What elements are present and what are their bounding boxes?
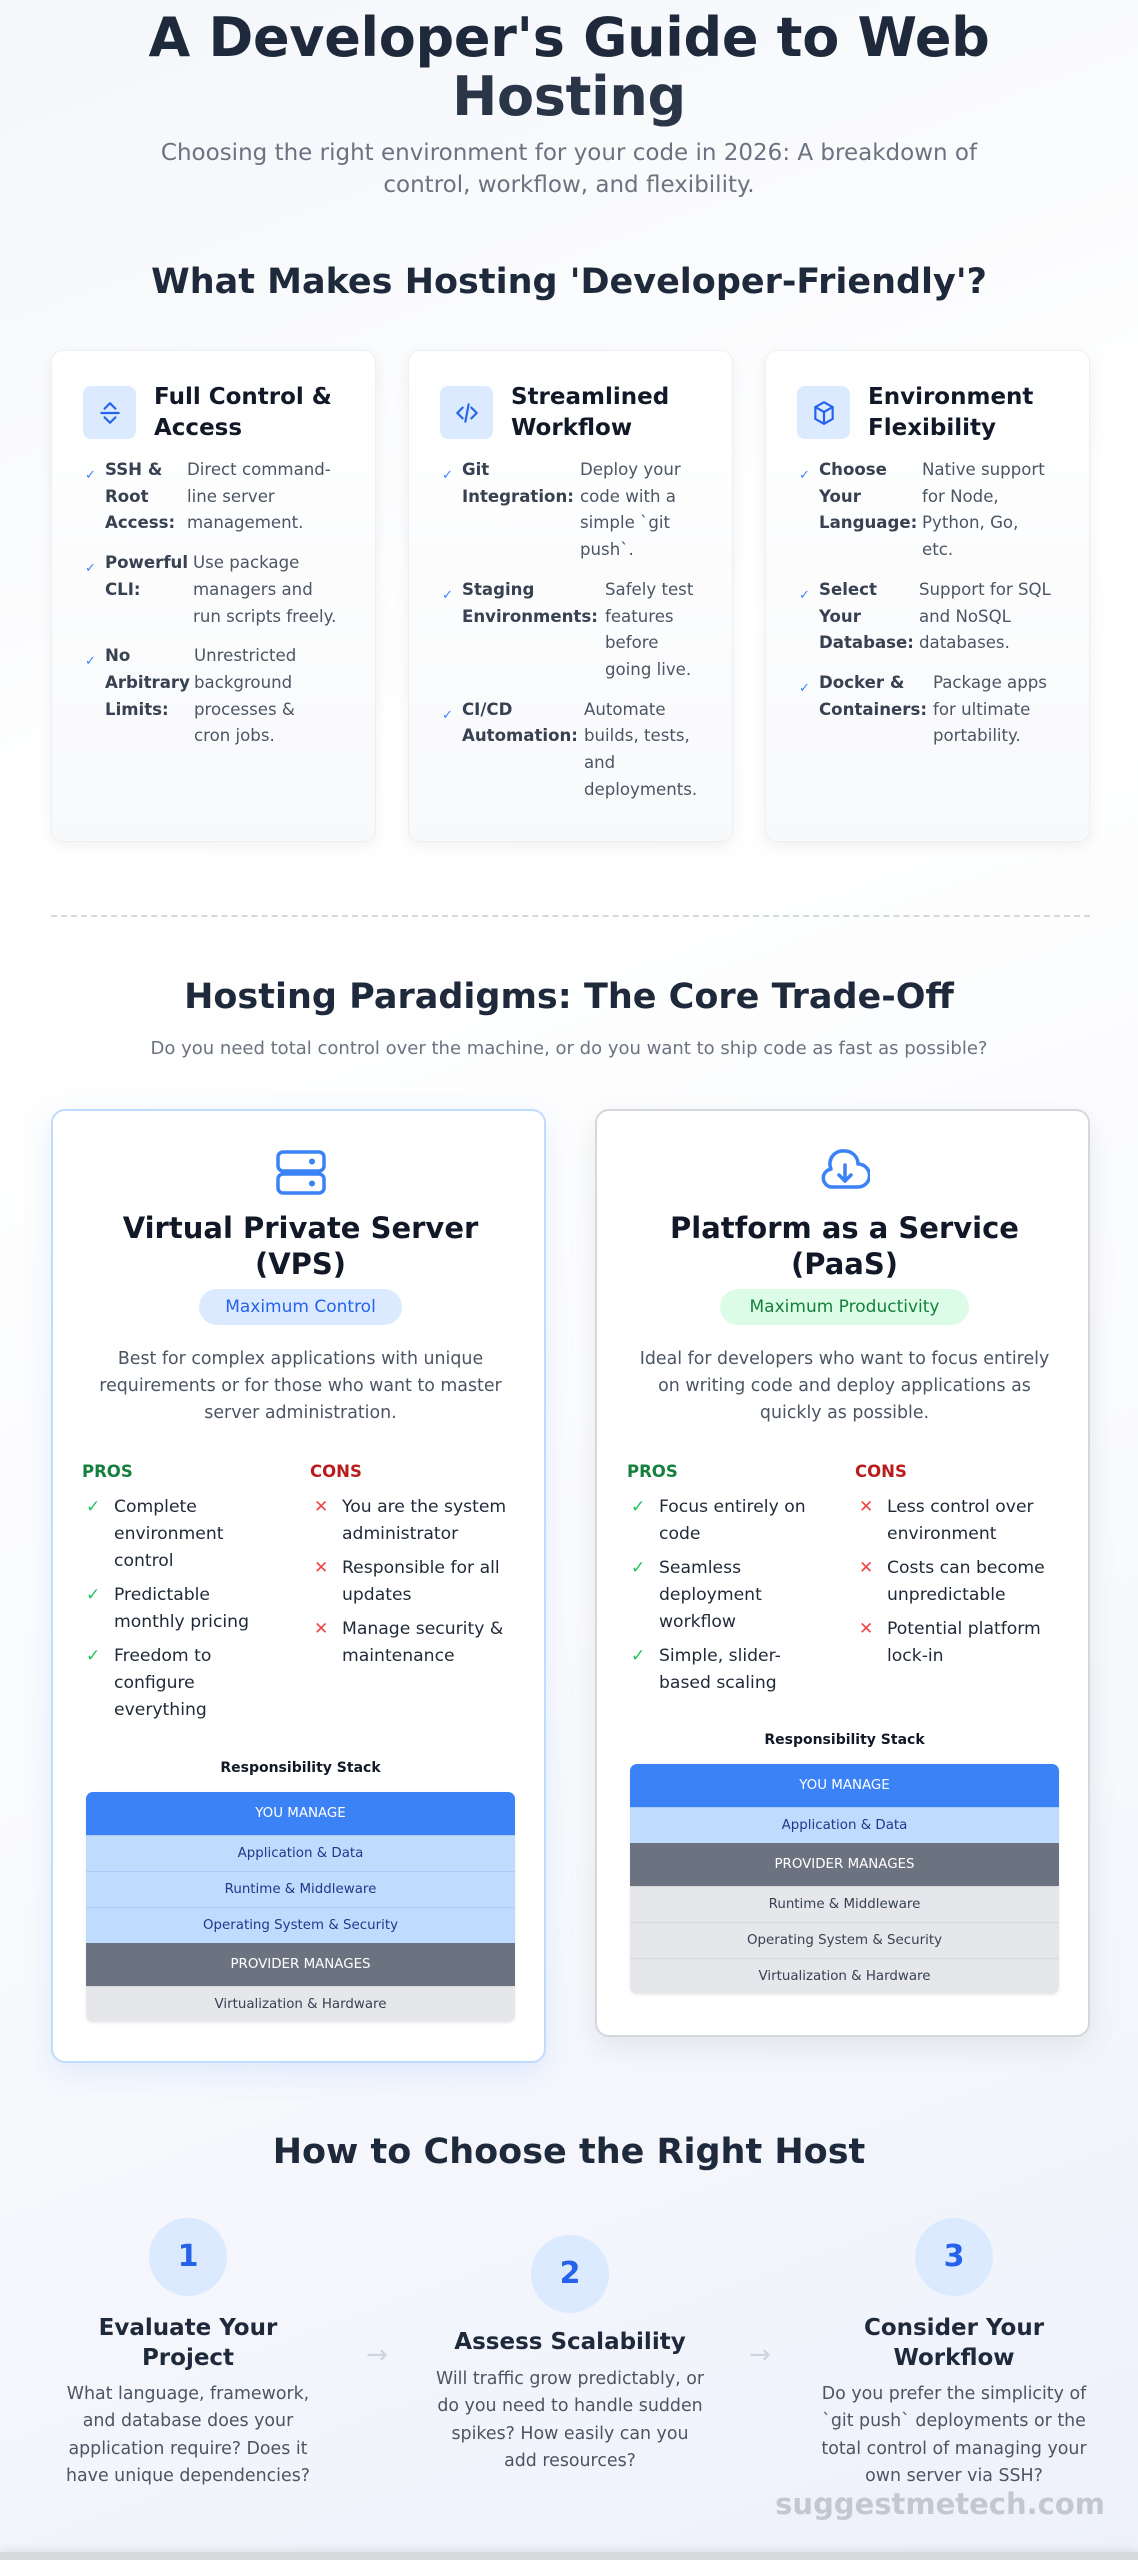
list: flexibility features: ✓ xyxy=(799,681,810,696)
icon: code xyxy=(440,386,493,439)
panel: streamlined workflow xyxy=(408,350,733,842)
list: PaaS cons: environment xyxy=(887,1524,996,1544)
list: control features: cron jobs. xyxy=(194,726,275,745)
list: VPS cons: CONS xyxy=(310,1462,362,1481)
text: VPS description: server administration. xyxy=(204,1403,397,1423)
list: workflow features: and xyxy=(584,753,615,772)
list: workflow features: push`. xyxy=(580,540,634,559)
list: workflow features: Deploy your xyxy=(580,460,681,479)
chart: PaaS responsibility stack: Operating System & Security xyxy=(747,1933,942,1948)
list: PaaS pros xyxy=(627,1462,806,1693)
list: control features: managers and xyxy=(193,580,313,599)
list: control features: ✓ xyxy=(85,654,96,669)
list: control features: run scripts freely. xyxy=(193,607,336,626)
list: VPS cons: You are the system xyxy=(342,1497,506,1517)
chart: VPS responsibility stack: Application & Data xyxy=(238,1846,363,1861)
list: workflow features: ✓ xyxy=(442,468,453,483)
icon: cube xyxy=(797,386,850,439)
text: PaaS description: quickly as possible. xyxy=(760,1403,929,1423)
list: workflow features: Safely test xyxy=(605,580,693,599)
text: scalability description: spikes? How easily can you xyxy=(452,2424,688,2444)
text: scalability description: Will traffic grow predictably, or xyxy=(436,2369,704,2389)
subtitle xyxy=(161,140,978,198)
list: control features: ✓ xyxy=(85,561,96,576)
text: PaaS description: Ideal for developers who want to focus entirely xyxy=(640,1349,1049,1369)
list: PaaS cons xyxy=(855,1462,1045,1666)
list: VPS pros: control xyxy=(114,1551,174,1571)
heading: flexibility: Flexibility xyxy=(868,415,996,441)
panel: PaaS xyxy=(595,1109,1090,2037)
subtitle: paradigms: Do you need total control over the machine, or do you want to ship code as fast as possible? xyxy=(151,1038,987,1059)
title xyxy=(148,6,990,128)
heading: workflow: Workflow xyxy=(511,415,632,441)
list: VPS pros xyxy=(82,1462,249,1720)
list: VPS pros: everything xyxy=(114,1700,207,1720)
list: workflow features: features xyxy=(605,607,674,626)
panel: full control & access xyxy=(51,350,376,842)
list: PaaS cons: lock-in xyxy=(887,1646,944,1666)
icon: cloud download xyxy=(822,1149,870,1189)
list: PaaS pros: code xyxy=(659,1524,700,1544)
heading: workflow xyxy=(864,2315,1044,2371)
list: VPS cons: ✕ xyxy=(314,1558,328,1578)
step 3 xyxy=(821,2218,1087,2486)
list: PaaS cons: ✕ xyxy=(859,1558,873,1578)
list: control features: Root xyxy=(105,487,149,506)
list: control features: management. xyxy=(187,513,303,532)
list: flexibility features: portability. xyxy=(933,726,1021,745)
list: workflow features: Automate xyxy=(584,700,666,719)
heading: full control: Full Control & xyxy=(154,384,332,410)
list: VPS cons: ✕ xyxy=(314,1497,328,1517)
list: control features: ✓ xyxy=(85,468,96,483)
chart: PaaS responsibility stack: YOU MANAGE xyxy=(799,1778,890,1793)
list: flexibility features: ✓ xyxy=(799,588,810,603)
list: PaaS cons: unpredictable xyxy=(887,1585,1006,1605)
list: VPS cons: maintenance xyxy=(342,1646,455,1666)
heading: flexibility: Environment xyxy=(868,384,1033,410)
list: control features: Use package xyxy=(193,553,299,572)
panel: VPS xyxy=(51,1109,546,2063)
text: evaluate description xyxy=(66,2384,310,2486)
list: PaaS pros: based scaling xyxy=(659,1673,777,1693)
heading: VPS: Virtual Private Server xyxy=(123,1211,478,1245)
heading: workflow: Consider Your xyxy=(864,2315,1044,2341)
list: VPS pros: Complete xyxy=(114,1497,197,1517)
heading: how to choose: How to Choose the Right Host xyxy=(273,2132,865,2172)
list: control features xyxy=(85,460,336,745)
chart: PaaS responsibility stack: Runtime & Middleware xyxy=(769,1897,920,1912)
heading: scalability: Assess Scalability xyxy=(454,2329,686,2355)
text: workflow description: own server via SSH? xyxy=(865,2466,1043,2486)
list: VPS pros: ✓ xyxy=(86,1646,100,1666)
icon: server xyxy=(276,1150,326,1195)
chart: VPS responsibility stack: Operating System & Security xyxy=(203,1918,398,1933)
text: workflow description: Do you prefer the simplicity of xyxy=(822,2384,1086,2404)
heading: full control xyxy=(154,384,332,441)
text: evaluate description: application require? Does it xyxy=(68,2439,308,2459)
list: PaaS cons: Less control over xyxy=(887,1497,1034,1517)
subtitle: control, workflow, and flexibility. xyxy=(383,172,755,198)
list: VPS pros: Predictable xyxy=(114,1585,210,1605)
list: flexibility features: Native support xyxy=(922,460,1045,479)
step 2 xyxy=(436,2235,704,2471)
list: flexibility features: Support for SQL xyxy=(919,580,1051,599)
list: flexibility features: Python, Go, xyxy=(922,513,1018,532)
list: VPS pros: PROS xyxy=(82,1462,133,1481)
list: VPS pros: environment xyxy=(114,1524,223,1544)
list: PaaS pros: PROS xyxy=(627,1462,678,1481)
list: PaaS cons: Costs can become xyxy=(887,1558,1045,1578)
heading: hosting paradigms: Hosting Paradigms: The Core Trade-Off xyxy=(184,977,954,1017)
heading: PaaS: Platform as a Service xyxy=(670,1211,1019,1245)
list: control features: SSH & xyxy=(105,460,162,479)
text: workflow description: `git push` deployments or the xyxy=(822,2411,1086,2431)
list: flexibility features: for Node, xyxy=(922,487,999,506)
list: PaaS pros: Seamless xyxy=(659,1558,741,1578)
list: flexibility features: for ultimate xyxy=(933,700,1030,719)
chart: PaaS responsibility stack: PROVIDER MANAGES xyxy=(774,1857,915,1872)
text: scalability description xyxy=(436,2369,704,2471)
heading: workflow: Streamlined xyxy=(511,384,669,410)
list: workflow features: Automation: xyxy=(462,726,578,745)
list: control features: Unrestricted xyxy=(194,646,296,665)
text: evaluate description: What language, framework, xyxy=(67,2384,309,2404)
list: workflow features: simple `git xyxy=(580,513,670,532)
icon: number 3 xyxy=(915,2218,993,2296)
list: PaaS pros: Simple, slider- xyxy=(659,1646,781,1666)
list: VPS cons xyxy=(310,1462,506,1666)
list: control features: Limits: xyxy=(105,700,169,719)
list: PaaS pros: ✓ xyxy=(631,1497,645,1517)
list: control features: Powerful xyxy=(105,553,188,572)
badge: maximum control xyxy=(199,1289,402,1325)
list: VPS pros: ✓ xyxy=(86,1585,100,1605)
list: flexibility features: ✓ xyxy=(799,468,810,483)
list: PaaS pros: ✓ xyxy=(631,1558,645,1578)
badge: maximum productivity: Maximum Productivity xyxy=(750,1297,939,1317)
list: workflow features: ✓ xyxy=(442,708,453,723)
list: workflow features: deployments. xyxy=(584,780,697,799)
text: scalability description: do you need to handle sudden xyxy=(437,2396,703,2416)
list: control features: Direct command- xyxy=(187,460,331,479)
badge: maximum control: Maximum Control xyxy=(225,1297,376,1317)
heading: evaluate xyxy=(99,2315,278,2371)
list: VPS cons: updates xyxy=(342,1585,412,1605)
list: control features: CLI: xyxy=(105,580,141,599)
list: VPS pros: configure xyxy=(114,1673,195,1693)
heading: developer-friendly: What Makes Hosting 'Developer-Friendly'? xyxy=(151,262,987,302)
list: workflow features: going live. xyxy=(605,660,691,679)
list: workflow features: builds, tests, xyxy=(584,726,690,745)
text: VPS description: requirements or for those who want to master xyxy=(99,1376,502,1396)
list: PaaS cons: CONS xyxy=(855,1462,907,1481)
chart: PaaS responsibility stack: Application & Data xyxy=(782,1818,907,1833)
heading: evaluate: Evaluate Your xyxy=(99,2315,277,2341)
list: workflow features xyxy=(442,460,697,799)
text: VPS description xyxy=(99,1349,502,1423)
list: VPS cons: ✕ xyxy=(314,1619,328,1639)
subtitle: Choosing the right environment for your code in 2026: A breakdown of xyxy=(161,140,977,166)
list: control features: background xyxy=(194,673,292,692)
text: evaluate description: have unique dependencies? xyxy=(66,2466,310,2486)
list: control features: processes & xyxy=(194,700,295,719)
list: workflow features: code with a xyxy=(580,487,676,506)
badge: maximum productivity xyxy=(720,1289,969,1325)
text: PaaS description xyxy=(640,1349,1049,1423)
list: workflow features: Integration: xyxy=(462,487,574,506)
text: scalability description: add resources? xyxy=(504,2451,636,2471)
heading: VPS responsibility stack: Responsibility Stack xyxy=(220,1760,381,1776)
list: VPS pros: monthly pricing xyxy=(114,1612,249,1632)
heading: workflow: Workflow xyxy=(893,2345,1015,2371)
text: workflow description xyxy=(821,2384,1087,2486)
panel: environment flexibility xyxy=(765,350,1090,842)
text: PaaS description: on writing code and deploy applications as xyxy=(658,1376,1031,1396)
heading: VPS xyxy=(122,1211,478,1281)
icon: control arrows xyxy=(83,386,136,439)
list: flexibility features: Language: xyxy=(819,513,917,532)
list: PaaS cons: ✕ xyxy=(859,1619,873,1639)
list: flexibility features: Database: xyxy=(819,633,914,652)
chart: VPS responsibility stack xyxy=(86,1792,515,2022)
watermark: suggestmetech.com xyxy=(775,2487,1105,2521)
list: flexibility features: Select xyxy=(819,580,877,599)
list: workflow features: before xyxy=(605,633,658,652)
list: flexibility features: Your xyxy=(819,607,861,626)
list: flexibility features: etc. xyxy=(922,540,953,559)
list: flexibility features: Docker & xyxy=(819,673,904,692)
text: VPS description: Best for complex applications with unique xyxy=(118,1349,483,1369)
heading: full control: Access xyxy=(154,415,242,441)
list: flexibility features: Containers: xyxy=(819,700,927,719)
text: workflow description: total control of managing your xyxy=(821,2439,1087,2459)
list: workflow features: Git xyxy=(462,460,489,479)
list: VPS cons: Responsible for all xyxy=(342,1558,500,1578)
list: VPS pros: Freedom to xyxy=(114,1646,211,1666)
icon: number 2 xyxy=(531,2235,609,2313)
list: VPS cons: Manage security & xyxy=(342,1619,503,1639)
list: flexibility features: Your xyxy=(819,487,861,506)
list: workflow features: ✓ xyxy=(442,588,453,603)
chart: VPS responsibility stack: Runtime & Middleware xyxy=(225,1882,376,1897)
list: VPS cons: administrator xyxy=(342,1524,458,1544)
icon: number 2: 2 xyxy=(560,2256,580,2291)
heading: PaaS xyxy=(670,1211,1019,1281)
chart: VPS responsibility stack: PROVIDER MANAGES xyxy=(230,1957,371,1972)
arrow 1: → xyxy=(366,2340,388,2370)
list: PaaS cons: Potential platform xyxy=(887,1619,1041,1639)
heading: flexibility xyxy=(868,384,1033,441)
list: PaaS pros: workflow xyxy=(659,1612,736,1632)
list: control features: No xyxy=(105,646,130,665)
list: workflow features: CI/CD xyxy=(462,700,512,719)
list: VPS pros: ✓ xyxy=(86,1497,100,1517)
title: Hosting xyxy=(452,65,686,128)
list: PaaS pros: Focus entirely on xyxy=(659,1497,806,1517)
list: control features: Arbitrary xyxy=(105,673,190,692)
icon: number 1 xyxy=(149,2218,227,2296)
list: flexibility features xyxy=(799,460,1051,745)
list: flexibility features: Package apps xyxy=(933,673,1047,692)
list: flexibility features: Choose xyxy=(819,460,887,479)
list: flexibility features: databases. xyxy=(919,633,1010,652)
chart: VPS responsibility stack: Virtualization & Hardware xyxy=(215,1997,386,2012)
list: workflow features: Environments: xyxy=(462,607,598,626)
icon: number 1: 1 xyxy=(178,2239,198,2274)
heading: workflow xyxy=(511,384,669,441)
text: evaluate description: and database does your xyxy=(83,2411,293,2431)
arrow 2: → xyxy=(749,2340,771,2370)
list: flexibility features: and NoSQL xyxy=(919,607,1011,626)
heading: PaaS: (PaaS) xyxy=(791,1247,898,1281)
chart: PaaS responsibility stack: Virtualization & Hardware xyxy=(759,1969,930,1984)
heading: VPS: (VPS) xyxy=(255,1247,346,1281)
list: PaaS pros: ✓ xyxy=(631,1646,645,1666)
list: workflow features: Staging xyxy=(462,580,534,599)
icon: number 3: 3 xyxy=(944,2239,964,2274)
list: PaaS cons: ✕ xyxy=(859,1497,873,1517)
step 1 xyxy=(66,2218,310,2486)
list: control features: line server xyxy=(187,487,275,506)
chart: PaaS responsibility stack xyxy=(630,1764,1059,1994)
list: control features: Access: xyxy=(105,513,175,532)
heading: evaluate: Project xyxy=(142,2345,234,2371)
list: PaaS pros: deployment xyxy=(659,1585,762,1605)
heading: PaaS responsibility stack: Responsibility Stack xyxy=(764,1732,925,1748)
chart: VPS responsibility stack: YOU MANAGE xyxy=(255,1806,346,1821)
title: A Developer's Guide to Web xyxy=(148,6,990,69)
